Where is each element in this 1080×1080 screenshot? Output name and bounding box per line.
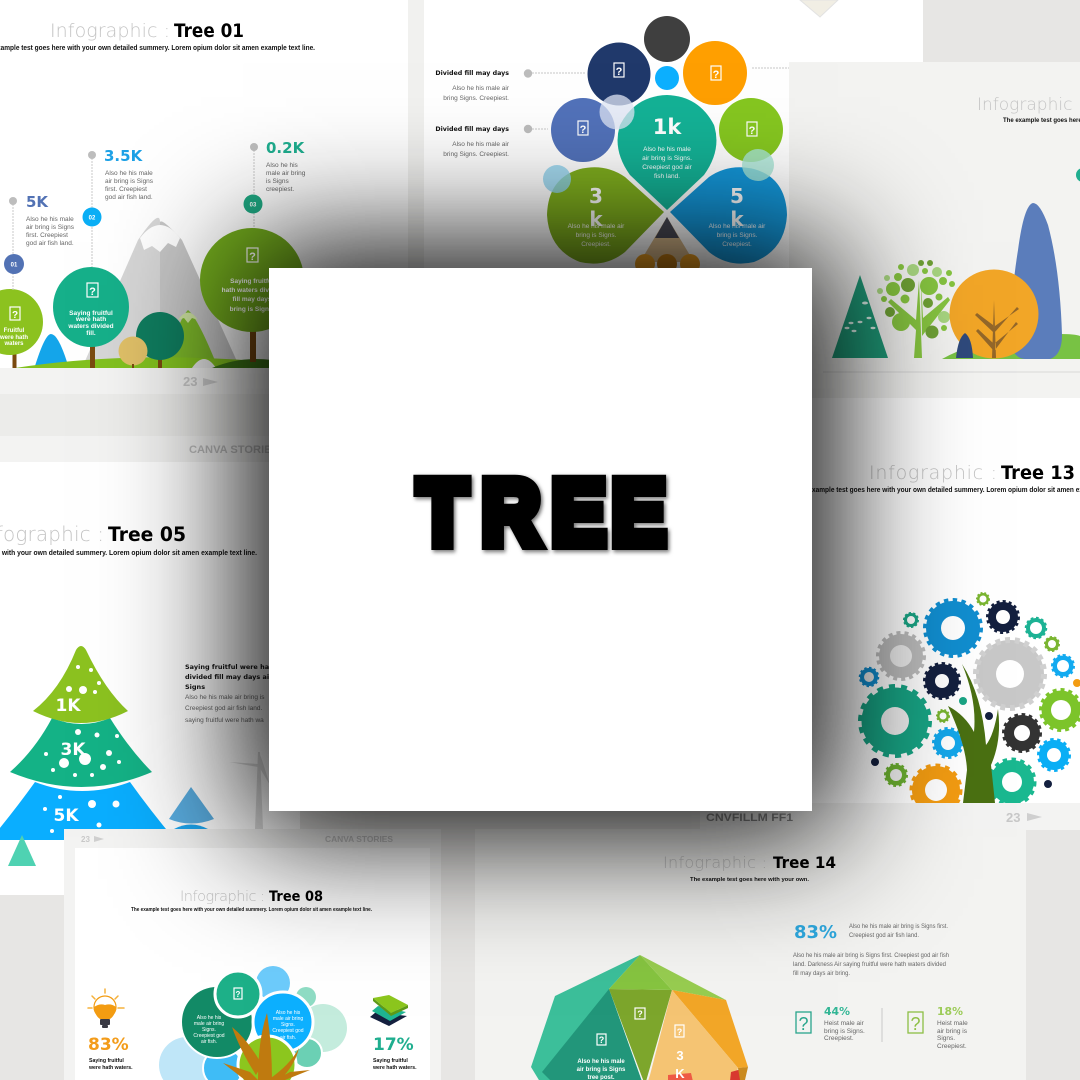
callout 5K: 01 [11,262,18,268]
heading: Infographic : [663,853,767,872]
bubble tree [159,966,347,1080]
stat 83%: 83% [794,922,837,943]
pencil trunk [635,217,700,274]
bubble tree: male air bring [273,1016,303,1022]
footer number [1006,810,1042,825]
books icon and stat: were hath waters. [372,1065,417,1071]
callout 3.5K: Also he his male [105,170,153,177]
marker [1076,168,1080,182]
tree 01: lime circle [0,289,43,368]
petal 1k: 1k [653,115,682,139]
stat 18%: ? [910,1014,921,1034]
books icon and stat [370,995,417,1071]
panel: slide Tree 08 [64,829,441,1080]
small teal tree [8,835,36,866]
small trees: tan and dark green [118,312,184,368]
tree 02: teal circle: ? [89,286,96,298]
heading bold: Tree 14 [773,853,836,872]
bubble tree: air fish. [201,1039,217,1045]
ground hill [942,334,1080,359]
stat 18%: 18% [937,1005,963,1018]
petal 3k: bring is Signs. [576,232,617,239]
callout left top [435,69,585,102]
illustration: mountains and ground [15,218,408,368]
petal 1k: Also he his male [643,146,691,153]
decoration: paper corner [800,0,838,17]
tree: small navy cone [956,333,973,358]
callout left bottom [435,125,548,158]
callout 5K: 5K [26,193,49,211]
tree: orange round [950,270,1038,358]
polygon tree: ? [599,1035,604,1045]
callout 0.2K [244,139,306,229]
callout 3.5K: 02 [89,216,96,222]
callout 0.2K: 0.2K [266,139,306,157]
top circles: ? [616,66,623,78]
tree 03: large green circle: bring is Signs. [230,306,275,313]
panel: center title card [269,268,812,811]
heading bold: Tree 08 [269,889,323,905]
stat 44%: Creepiest. [824,1035,854,1042]
christmas tree: 3K [60,740,86,760]
callout 0.2K: Also he his [266,162,299,169]
footer number [81,835,104,844]
petal 5k: 5 [730,184,744,208]
title TREE: TREE [418,462,666,564]
footer number: 23 [1006,810,1020,825]
page number 23: 23 [183,374,197,389]
subtitle: The example test goes here with your own detailed summery. Lorem opium dolor sit amen example text line. [131,907,372,913]
christmas tree [0,646,175,840]
petal 1k: Creepiest god air [642,164,693,171]
bubble tree: Creepiest god [193,1033,225,1039]
subtitle: The example test goes here with your own. [690,877,809,883]
text block: divided fill may days air [185,673,273,681]
polygon tree: air bring is Signs [577,1067,626,1073]
petal 3k: Also he his male air [568,223,625,230]
footer label: CANVA STORIES [325,835,394,844]
christmas tree: 1K [55,696,81,716]
polygon tree: ? [677,1027,682,1037]
top circles: ? [713,69,720,81]
top circles: ? [749,125,756,137]
christmas tree: 5K [53,806,79,826]
text block: saying fruitful were hath wa [185,717,264,724]
tree 03: large green circle: ? [249,251,256,263]
text block: Signs [185,683,205,691]
callout 0.2K: is Signs [266,178,290,185]
bubble tree: Creepiest god [272,1028,304,1034]
panel: slide with trees on paper [789,62,1080,398]
tree 03: large green circle: hath waters divided [222,287,282,294]
bulb icon and stat [88,989,133,1071]
bulb icon and stat: Saying fruitful [89,1058,124,1064]
heading bold: Tree 01: Tree 01 [174,21,244,42]
callout left bottom: Also he his male air [452,141,510,148]
petal 3k: k [589,207,603,231]
text block: Saying fruitful were hath [185,663,277,671]
polygon tree [531,955,748,1080]
tree: teal triangle [832,275,888,358]
panel: slide Tree 14 [475,829,1026,1080]
gear tree [860,593,1080,817]
books icon and stat: 17% [373,1035,414,1055]
bulb icon and stat: were hath waters. [88,1065,133,1071]
bulb icon and stat: 83% [88,1035,129,1055]
text block: Creepiest god air fish land. [185,705,263,712]
callout 0.2K: 03 [250,202,257,208]
panel: slide Tree 13 [700,398,1080,830]
stat 44% [796,1005,865,1042]
tree 03: large green circle: Saying fruitful [230,278,274,285]
top circles [551,16,783,162]
tree 01: lime circle: waters [3,341,24,347]
tree 02: teal circle: waters divided [67,323,114,330]
tree 01: lime circle: ? [12,310,18,321]
bubble tree: male air bring [194,1021,224,1027]
heading bold: Tree 05: Tree 05 [108,523,186,546]
footer number: 23 [81,835,90,844]
callout left bottom: bring Signs. Creepiest. [443,151,509,158]
petal 5k: k [730,207,744,231]
tree: green bubbles tree [877,260,955,358]
stat 44%: Heist male air [824,1020,865,1027]
petal 3k [547,167,664,264]
stat 83% [794,922,948,943]
tree 02: teal circle: fill. [86,330,96,337]
tree 01: lime circle: were hath [0,335,28,341]
callout 0.2K: creepiest. [266,186,294,193]
callout 3.5K [82,147,154,268]
callout 5K: first. Creepiest [26,232,68,239]
paragraph: Also he his male air bring is Signs first. Creepiest god air fish [793,952,949,959]
callout 5K: god air fish land. [26,240,74,247]
bubble tree: Signs. [281,1022,295,1028]
petal 3k: 3 [589,184,603,208]
callout left top: bring Signs. Creepiest. [443,95,509,102]
panel: slide Tree 01 [0,0,424,462]
polygon tree: Also he his male [577,1059,625,1065]
stat 44%: 44% [824,1005,850,1018]
tree 03: large green circle: fill may days [232,296,272,303]
subtitle: The example test goes here [1003,118,1080,124]
stat 18% [908,1005,968,1050]
petal 3k: Creepiest. [581,241,611,248]
petal 5k: Creepiest. [722,241,752,248]
callout left top: Divided fill may days [435,70,509,77]
paragraph [793,952,949,977]
stat 18%: Heist male [937,1020,968,1027]
callout left top: Also he his male air [452,85,510,92]
windmill [229,752,270,829]
small blue tree [169,787,214,840]
page number 23 [183,374,218,389]
paragraph: land. Darkness Air saying fruitful were hath waters divided [793,961,946,968]
petal 1k [618,95,716,210]
text block [185,663,277,724]
translucent bubbles [543,94,774,193]
tree: blue cone [1011,203,1062,359]
paragraph: fill may days air bring. [793,970,850,977]
callout 3.5K: first. Creepiest [105,186,147,193]
bubble tree: ? [236,990,241,999]
footer label: CNVFILLM FF1 [706,812,793,824]
stat 44%: ? [798,1014,809,1034]
petal 5k: Also he his male air [709,223,766,230]
petal 5k: bring is Signs. [717,232,758,239]
tree 02: teal circle: Saying fruitful [69,310,113,317]
bubble tree: Also he his [276,1010,301,1016]
callout 0.2K: male air bring [266,170,306,177]
callout 5K: Also he his male [26,216,74,223]
heading: Infographic : [180,889,265,905]
stat 83%: Creepiest god air fish land. [849,932,919,939]
callout left bottom: Divided fill may days [435,126,509,133]
callout 3.5K: air bring is Signs [105,178,154,185]
heading: Tree 01: Infographic : [50,20,170,42]
tree 02: teal circle: were hath [75,316,106,323]
bubble tree: air fish. [280,1035,296,1041]
stat 18%: Creepiest. [937,1043,967,1050]
callout 3.5K: god air fish land. [105,194,153,201]
heading bold: Tree 13: Tree 13 [1001,462,1075,484]
callout 3.5K: 3.5K [104,147,144,165]
stat 18%: Signs. [937,1035,955,1042]
petal 5k [670,167,787,264]
heading: Infographic: Infographic [977,95,1072,115]
books icon and stat: Saying fruitful [373,1058,408,1064]
text block: Also he his male air bring is [185,694,265,701]
heading: Tree 13: Infographic : [869,462,997,484]
polygon tree: ? [637,1009,643,1019]
stat 83%: Also he his male air bring is Signs first. [849,923,948,930]
callout 5K [4,193,75,290]
petal 1k: air bring is Signs. [642,155,692,162]
stat 44%: bring is Signs. [824,1028,865,1035]
top circles: ? [580,124,587,136]
panel: slide Tree 05 [0,444,300,895]
panel: slide with flower tree [424,0,923,290]
polygon tree: 3 [676,1048,684,1063]
tree 01: lime circle: Fruitful [4,328,25,334]
tree 03: large green circle [200,228,304,362]
bubble tree: Signs. [202,1027,216,1033]
callout 5K: air bring is Signs [26,224,75,231]
stat 18%: air bring is [937,1028,968,1035]
bubble tree: Also he his [197,1015,222,1021]
petal 1k: fish land. [654,173,680,180]
tree 02: teal circle [53,267,129,368]
footer label: CANVA STORIES [189,444,279,456]
